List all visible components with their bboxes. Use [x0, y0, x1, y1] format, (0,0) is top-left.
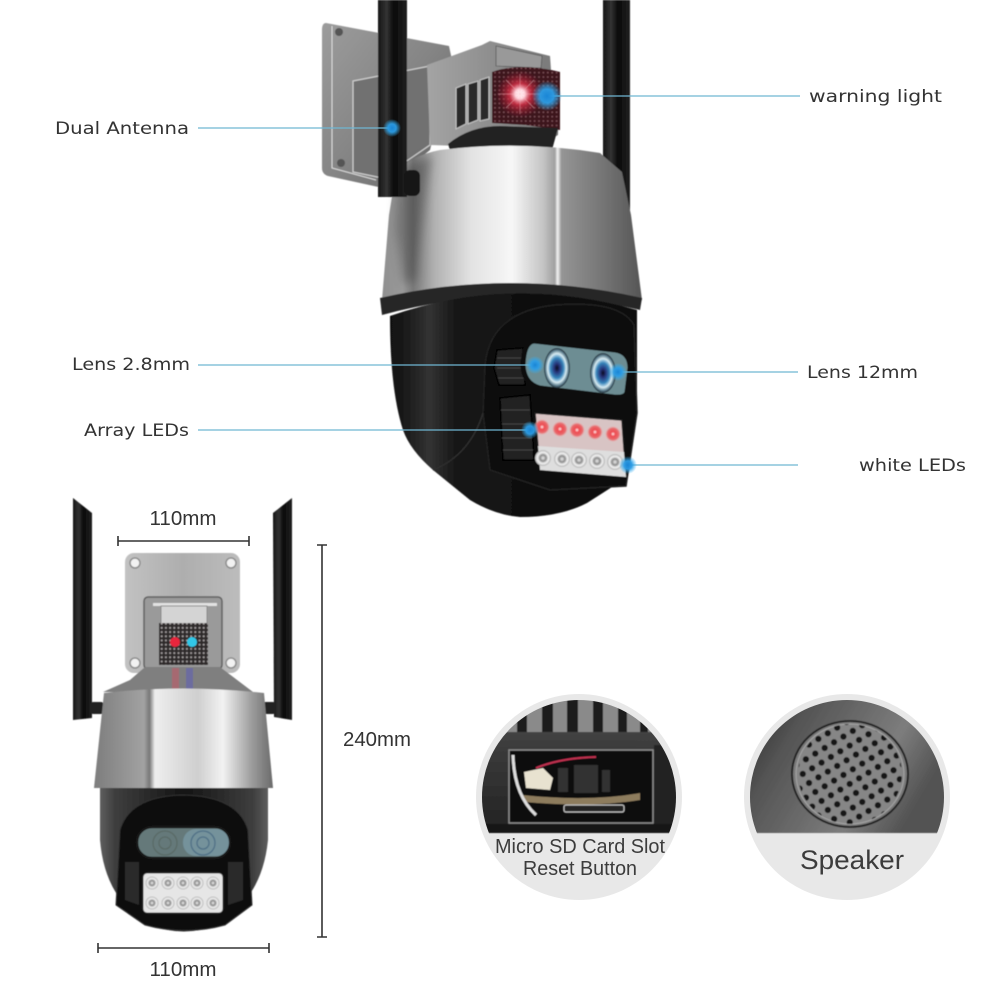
dimension: top width [118, 508, 249, 546]
wall mount plate [322, 23, 452, 188]
front view camera [73, 498, 292, 932]
grille [792, 721, 908, 827]
rear antenna [603, 0, 630, 215]
red LEDs [534, 419, 621, 442]
ribbed side panel [494, 348, 534, 460]
lens bay [116, 795, 252, 930]
white bent wire [513, 755, 536, 815]
photo of speaker [745, 695, 950, 833]
photo of slot [482, 700, 676, 834]
holes [798, 724, 902, 824]
dome [100, 788, 268, 932]
sd card slot [564, 805, 624, 812]
red light [170, 637, 180, 647]
plate recess [144, 597, 222, 669]
callout: white LEDs [619, 456, 966, 476]
vent ribs [516, 700, 648, 733]
red and blue reflection [172, 668, 193, 690]
silver housing [94, 688, 273, 788]
vent slots [456, 77, 489, 129]
dimension: bottom width: 110mm [150, 959, 216, 981]
black dome [390, 293, 637, 517]
dimension: top width: 110mm [150, 508, 216, 530]
lens bay [483, 304, 637, 490]
housing skirt [380, 283, 642, 315]
callout: Lens 2.8mm: Lens 2.8mm [72, 355, 190, 375]
detail circle: micro SD slot [475, 694, 685, 900]
dimension: height [317, 545, 411, 937]
dome crease [433, 413, 483, 470]
lens left [544, 348, 570, 388]
warning light grille [492, 67, 560, 130]
right lens [183, 829, 229, 856]
callout: Lens 12mm: Lens 12mm [807, 363, 918, 383]
red wire [536, 757, 596, 768]
callout: Lens 2.8mm [72, 355, 544, 375]
detail circle: micro SD slot: Reset Button [523, 858, 637, 880]
caption: Speaker [800, 845, 904, 875]
caption: Micro SD Card Slot [495, 836, 665, 858]
lens window [137, 827, 230, 858]
antenna left [378, 0, 420, 197]
top cover [153, 603, 217, 624]
neck [103, 667, 253, 692]
callout: Lens 12mm [609, 363, 918, 383]
components [558, 765, 610, 793]
left shoulder shade [396, 156, 432, 284]
callout: warning light [532, 81, 942, 111]
mount bracket [353, 66, 430, 178]
callout: Dual Antenna: Dual Antenna [55, 119, 189, 139]
dimension: height: 240mm [343, 729, 411, 751]
silver housing [382, 146, 642, 300]
antenna joints [90, 702, 276, 714]
callout: warning light: warning light [809, 87, 942, 107]
right side dark cover [654, 745, 676, 798]
blue light [187, 637, 197, 647]
photo bottom edge [486, 824, 672, 833]
mounting plate [125, 553, 240, 673]
dimension: bottom width [98, 943, 269, 981]
left lens [153, 831, 177, 855]
detail circle: speaker [744, 694, 950, 900]
warning grille [159, 623, 208, 665]
main camera photo [322, 0, 642, 517]
white LEDs [535, 450, 623, 470]
top panel [496, 46, 542, 68]
callout: Array LEDs [84, 421, 539, 441]
warning light housing [427, 41, 560, 146]
LED panel [534, 413, 626, 477]
circuit board [522, 793, 640, 805]
red warning glow [496, 70, 544, 118]
left antenna [73, 498, 92, 720]
white connector [524, 768, 553, 790]
callout: Dual Antenna [55, 119, 401, 139]
slot frame [509, 750, 653, 823]
lens right [590, 353, 616, 393]
lens housing [523, 341, 630, 397]
neck shadow [448, 126, 558, 150]
LED board [143, 873, 223, 913]
callout: Array LEDs: Array LEDs [84, 421, 189, 441]
callout: white LEDs: white LEDs [859, 456, 966, 476]
side ribs [125, 862, 243, 905]
right antenna [273, 498, 292, 720]
